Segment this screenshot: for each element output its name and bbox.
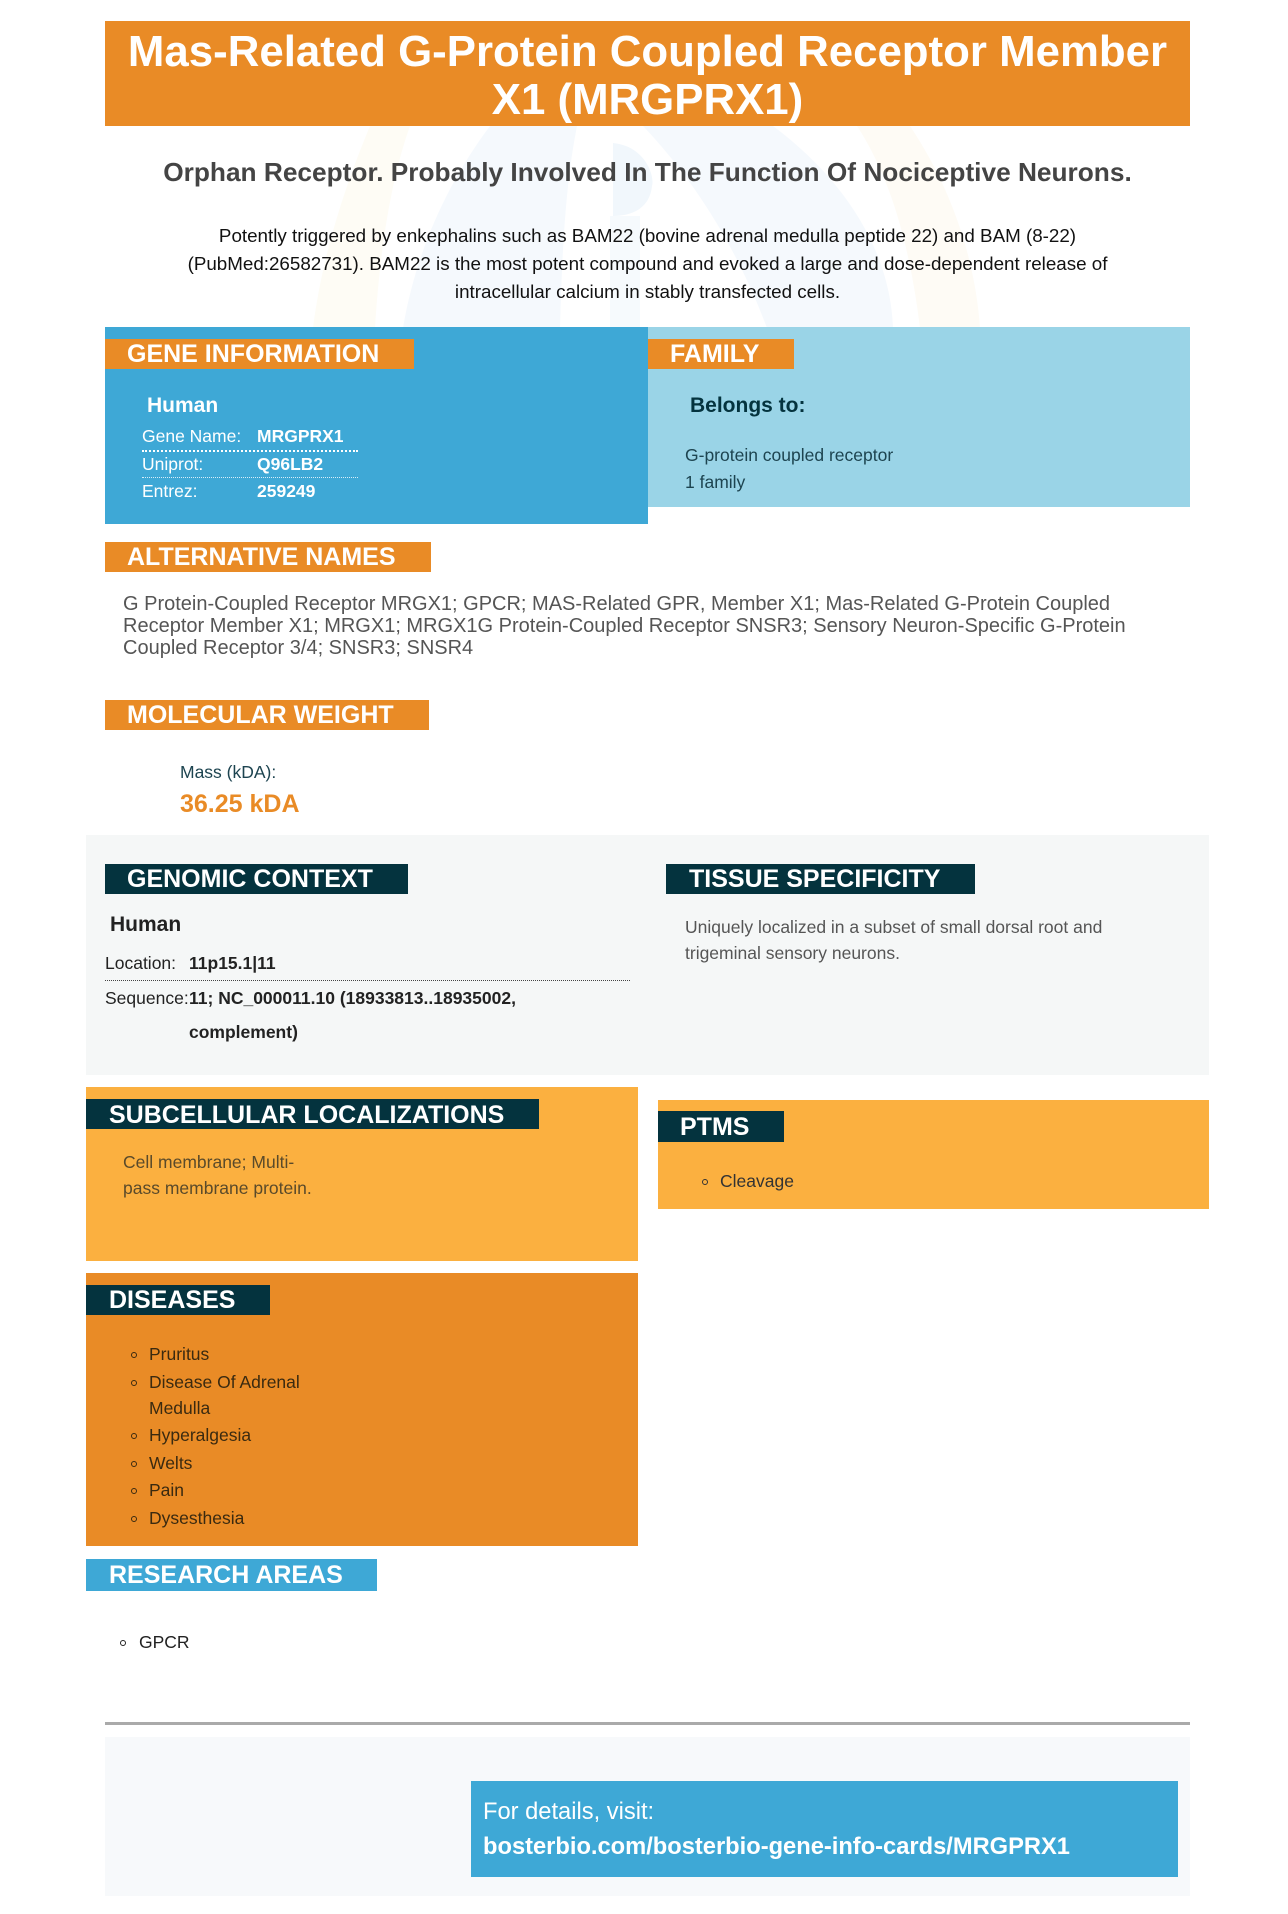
heading: research areas: RESEARCH AREAS <box>109 1561 343 1589</box>
panel: ptms <box>658 1100 1209 1209</box>
disease list: Welts <box>149 1453 192 1473</box>
description: Potently triggered by enkephalins such as BAM22 (bovine adrenal medulla peptide 22) and BAM (8-22) <box>219 225 1076 246</box>
localization text: pass membrane protein. <box>123 1178 312 1198</box>
ptm list item: Cleavage <box>720 1171 794 1191</box>
alternative names text: Receptor Member X1; MRGX1; MRGX1G Protein-Coupled Receptor SNSR3; Sensory Neuron-Specific G-Protein <box>123 615 1126 637</box>
research area item: GPCR <box>139 1632 190 1652</box>
title <box>105 21 1190 126</box>
disease list: Dysesthesia <box>149 1508 244 1528</box>
panel: subcellular localizations <box>86 1087 638 1261</box>
alternative names text: Coupled Receptor 3/4; SNSR3; SNSR4 <box>123 637 473 659</box>
heading: tissue specificity: TISSUE SPECIFICITY <box>689 865 940 893</box>
genomic details: 11p15.1|11 <box>189 953 276 973</box>
family text: 1 family <box>685 472 745 492</box>
heading: genomic context: GENOMIC CONTEXT <box>127 865 373 893</box>
disease list <box>131 1344 300 1528</box>
species label: Human <box>147 394 218 417</box>
panel: family <box>648 327 1190 507</box>
family text: G-protein coupled receptor <box>685 445 893 465</box>
watermark logo <box>314 126 980 327</box>
alternative names text <box>123 593 1126 659</box>
alternative names text: G Protein-Coupled Receptor MRGX1; GPCR; MAS-Related GPR, Member X1; Mas-Related G-Protein Coupled <box>123 593 1110 615</box>
subtitle: Orphan Receptor. Probably Involved In The Function Of Nociceptive Neurons. <box>163 157 1132 187</box>
title: Mas-Related G-Protein Coupled Receptor Member <box>128 27 1167 76</box>
panel: diseases <box>86 1273 638 1546</box>
localization text <box>123 1152 312 1198</box>
heading: molecular weight: MOLECULAR WEIGHT <box>127 701 394 729</box>
mass value: 36.25 kDA <box>180 790 300 818</box>
genomic details: complement) <box>189 1022 298 1042</box>
localization text: Cell membrane; Multi- <box>123 1152 294 1172</box>
disease list: Hyperalgesia <box>149 1425 251 1445</box>
tissue specificity text <box>685 917 1102 963</box>
callout: details link <box>471 1781 1178 1877</box>
heading: diseases <box>86 1285 270 1315</box>
heading: gene information: GENE INFORMATION <box>127 340 379 368</box>
heading: alternative names: ALTERNATIVE NAMES <box>127 543 396 571</box>
disease list: Pain <box>149 1480 184 1500</box>
heading: family <box>648 339 794 369</box>
heading: subcellular localizations: SUBCELLULAR LOCALIZATIONS <box>109 1101 504 1129</box>
gene details table: Q96LB2 <box>257 454 323 474</box>
tissue specificity text: Uniquely localized in a subset of small dorsal root and <box>685 917 1102 937</box>
genomic details: Location: <box>105 953 176 973</box>
heading: family: FAMILY <box>670 340 759 368</box>
genomic details: Sequence: <box>105 988 189 1008</box>
genomic details: 11; NC_000011.10 (18933813..18935002, <box>189 988 516 1008</box>
heading: ptms: PTMS <box>680 1113 749 1141</box>
belongs to label: Belongs to: <box>690 394 806 417</box>
heading: diseases: DISEASES <box>109 1286 235 1314</box>
mass label: Mass (kDA): <box>180 762 276 782</box>
disease list: Disease Of Adrenal <box>149 1372 300 1392</box>
gene details table: MRGPRX1 <box>257 426 344 446</box>
genomic details <box>105 953 630 1042</box>
gene details table: Entrez: <box>142 481 197 501</box>
description <box>188 225 1108 302</box>
callout label: For details, visit: <box>483 1799 654 1825</box>
bullet <box>120 1640 126 1646</box>
panel: gene information <box>105 327 648 524</box>
disease list: Pruritus <box>149 1344 209 1364</box>
bullet <box>702 1179 708 1185</box>
panel: footer <box>105 1737 1190 1896</box>
description: (PubMed:26582731). BAM22 is the most potent compound and evoked a large and dose-dependent release of <box>188 253 1107 274</box>
tissue specificity text: trigeminal sensory neurons. <box>685 943 900 963</box>
gene details table <box>142 426 358 501</box>
gene details table: Uniprot: <box>142 454 203 474</box>
callout url: bosterbio.com/bosterbio-gene-info-cards/MRGPRX1 <box>483 1834 1070 1860</box>
disease list: Medulla <box>149 1398 210 1418</box>
family text <box>685 445 893 492</box>
description: intracellular calcium in stably transfected cells. <box>455 281 840 302</box>
panel: genomic context and tissue specificity <box>86 835 1209 1075</box>
title: X1 (MRGPRX1) <box>492 75 803 124</box>
species label: Human <box>110 913 181 936</box>
heading: ptms <box>658 1111 784 1142</box>
gene details table: 259249 <box>257 481 315 501</box>
gene details table: Gene Name: <box>142 426 241 446</box>
